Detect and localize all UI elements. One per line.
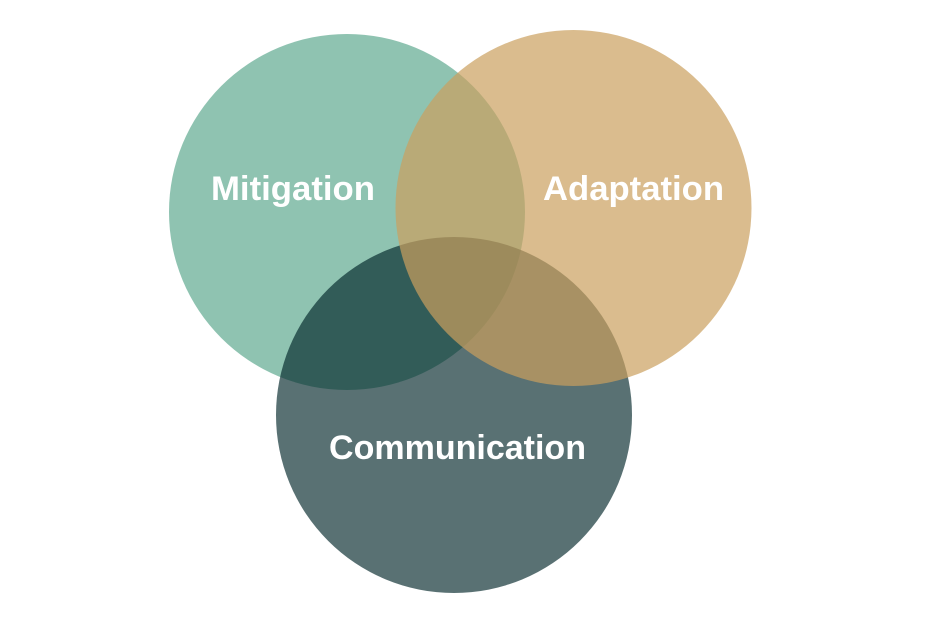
label: adaptation: Adaptation: [543, 170, 724, 208]
circle: mitigation: [169, 34, 525, 390]
circle: adaptation: [396, 30, 752, 386]
label: communication: Communication: [329, 429, 586, 467]
circle: communication: [276, 237, 632, 593]
label: mitigation: Mitigation: [211, 170, 375, 208]
